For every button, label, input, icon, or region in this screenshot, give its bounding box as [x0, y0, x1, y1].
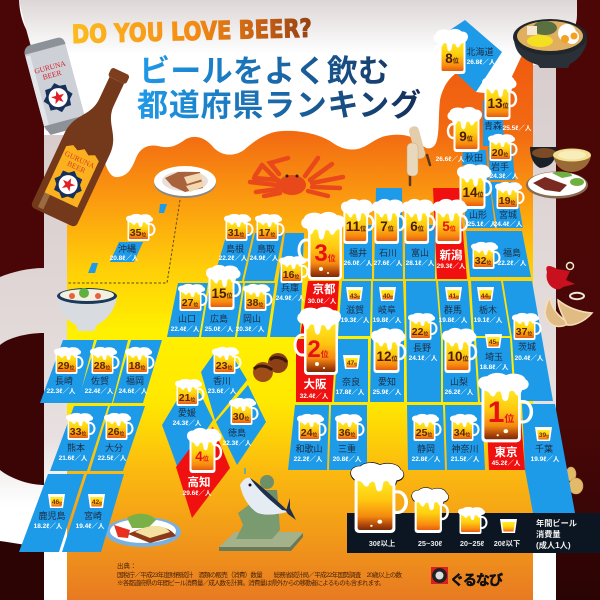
pref: 福井 [344, 225, 373, 279]
pref: 群馬 [438, 281, 472, 336]
pref: 山口: 山口 [178, 314, 196, 324]
pref: 宮崎 [62, 474, 124, 552]
pref: 栃木: 19.1ℓ／人 [474, 316, 503, 324]
pref: 静岡: 静岡 [417, 443, 435, 454]
pref: 兵庫: 兵庫 [281, 282, 299, 293]
source notes [117, 561, 402, 587]
pref: 岡山: 岡山 [243, 314, 261, 324]
pref: 大阪: 大阪 [304, 377, 327, 391]
pref: 滋賀 [338, 281, 371, 336]
source notes: ※各都道府県の年間ビール消費量／成人数を計算。消費量は県外からの移動者によるものも含まれます。 [117, 578, 385, 587]
pref: 宮城: 宮城 [499, 209, 517, 220]
pref: 徳島: 22.3ℓ／人 [223, 439, 252, 447]
pref: 岡山 [236, 283, 275, 337]
pref: 愛知: 愛知 [378, 376, 396, 387]
pref: 香川: 香川 [213, 376, 231, 386]
large mug: 2位 [295, 307, 341, 375]
medium mugs: 25–30 ℓ ranks: 8位 [445, 51, 459, 66]
pref: 岐阜: 岐阜 [378, 304, 396, 315]
pref: 宮城 [490, 182, 523, 228]
pref: 神奈川: 神奈川 [451, 443, 479, 454]
small mugs: 20–25 ℓ ranks: 17位 [259, 227, 275, 239]
pref: 福島 [466, 231, 531, 277]
pref: 青森 [483, 100, 532, 146]
legend: beer consumption scale: 30ℓ以上 [369, 539, 396, 548]
pref: 山形 [465, 170, 497, 228]
small mugs: 20–25 ℓ ranks: 37位 [516, 326, 532, 338]
pref: 山形: 25.1ℓ／人 [468, 220, 497, 228]
pref: 山梨 [443, 338, 478, 402]
pref: 京都 [300, 281, 339, 337]
pref: 千葉: 千葉 [535, 443, 553, 454]
pref: 三重: 20.8ℓ／人 [333, 455, 362, 463]
illustration: takoyaki [253, 353, 288, 382]
pref: 新潟 [433, 188, 467, 279]
pref: 茨城: 20.4ℓ／人 [515, 354, 544, 362]
pref: 青森: 青森 [484, 120, 502, 131]
pref: 愛媛 [162, 393, 213, 466]
pref: 大阪: 32.4ℓ／人 [300, 392, 329, 400]
pref: 高知: 高知 [188, 475, 210, 489]
pref: 奈良 [334, 339, 368, 402]
pref: 京都: 30.0ℓ／人 [308, 297, 337, 305]
pref: 福井: 26.0ℓ／人 [344, 259, 373, 267]
pref: 新潟: 新潟 [440, 248, 463, 262]
pref: 佐賀: 22.4ℓ／人 [85, 387, 114, 395]
illustration: peanuts [545, 467, 583, 506]
small mugs: 20–25 ℓ ranks: 26位 [108, 426, 124, 438]
pref: 岩手: 24.3ℓ／人 [490, 172, 519, 180]
pref: 沖縄: 沖縄 [118, 243, 136, 254]
pref: 栃木: 栃木 [479, 304, 497, 315]
pref: 栃木 [471, 281, 510, 336]
small mugs: 20–25 ℓ ranks: 21位 [179, 392, 195, 404]
pref: 宮城: 24.4ℓ／人 [494, 220, 523, 228]
title: japanese heading: ビールをよく飲む [139, 54, 389, 89]
small glasses: under 20 ℓ ranks: 41位 [449, 293, 459, 300]
pref: 和歌山 [288, 405, 329, 470]
pref: 高知: 29.6ℓ／人 [183, 489, 212, 497]
pref: 石川: 石川 [379, 248, 397, 258]
small mugs: 20–25 ℓ ranks: 25位 [416, 427, 432, 439]
pref: 大分: 22.5ℓ／人 [98, 454, 127, 462]
pref: 熊本: 熊本 [67, 442, 85, 453]
medium mugs: 25–30 ℓ ranks: 13位 [487, 96, 509, 111]
pref: 熊本: 21.6ℓ／人 [59, 454, 88, 462]
title: japanese heading: 都道府県ランキング [137, 88, 421, 123]
pref: 秋田: 26.6ℓ／人 [436, 155, 465, 163]
pref: 福岡: 24.6ℓ／人 [119, 387, 148, 395]
pref: 長崎 [40, 340, 94, 403]
small mugs: 20–25 ℓ ranks: 36位 [339, 427, 355, 439]
pref: 三重 [329, 405, 367, 470]
pref: 神奈川 [445, 405, 485, 470]
pref: 愛媛: 24.3ℓ／人 [173, 419, 202, 427]
pref: 徳島 [216, 385, 266, 465]
pref: 広島: 25.0ℓ／人 [205, 325, 234, 333]
small mugs: 20–25 ℓ ranks: 16位 [283, 269, 299, 281]
small glasses: under 20 ℓ ranks: 44位 [481, 293, 491, 300]
illustration: beer bottle [30, 61, 144, 228]
pref: 東京: 東京 [494, 445, 518, 459]
pref: 山口: 22.4ℓ／人 [171, 325, 200, 333]
small glasses: under 20 ℓ ranks [48, 287, 552, 508]
pref: 佐賀 [77, 340, 128, 403]
legend: beer consumption scale: 年間ビール [536, 518, 577, 528]
illustration: pork dish [154, 166, 216, 198]
pref: 京都: 京都 [312, 282, 336, 296]
pref: 福岡 [113, 340, 162, 403]
pref: 長崎: 22.3ℓ／人 [47, 387, 76, 395]
pref: 滋賀: 滋賀 [346, 304, 364, 315]
small glasses: under 20 ℓ ranks: 47位 [347, 360, 357, 367]
pref: 茨城 [503, 281, 553, 401]
pref: 滋賀: 19.3ℓ／人 [341, 316, 370, 324]
pref: 長崎: 長崎 [55, 375, 73, 386]
pref: 北海道 [450, 20, 502, 92]
pref: 東京 [486, 405, 525, 470]
small mugs: 20–25 ℓ ranks: 28位 [94, 360, 110, 372]
title: do you love beer: DO YOU LOVE BEER? [71, 14, 312, 49]
pref: 鹿児島 [19, 474, 84, 552]
pref: 石川: 27.6ℓ／人 [374, 259, 403, 267]
pref: 鳥取: 鳥取 [257, 243, 275, 254]
small glasses: under 20 ℓ ranks: 42位 [92, 499, 102, 506]
pref: 宮崎: 19.4ℓ／人 [76, 522, 105, 530]
small mugs: 20–25 ℓ ranks: 32位 [475, 255, 491, 267]
medium mugs: 25–30 ℓ ranks: 12位 [376, 349, 398, 364]
pref: 愛媛: 愛媛 [178, 407, 196, 418]
pref: 静岡: 22.8ℓ／人 [412, 455, 441, 463]
pref: 静岡 [407, 405, 445, 470]
illustration: soup bowls [530, 147, 591, 172]
pref: 沖縄: 20.8ℓ／人 [110, 254, 139, 262]
pref: 長野 [406, 281, 441, 402]
pref: 岡山: 20.3ℓ／人 [236, 325, 265, 333]
logo: gurunavi: ぐるなび [450, 572, 503, 588]
large mug: 3位: 3位 [314, 240, 336, 267]
illustration: gyoza [545, 298, 592, 326]
logo: gurunavi [431, 567, 503, 588]
small mugs: 20–25 ℓ ranks: 34位 [454, 427, 470, 439]
pref: 島根: 島根 [226, 243, 244, 254]
pref: 岩手: 岩手 [491, 161, 509, 172]
legend: beer consumption scale: 25~30ℓ [418, 539, 443, 548]
pref: 佐賀: 佐賀 [91, 375, 109, 386]
pref: 千葉: 19.9ℓ／人 [531, 455, 560, 463]
pref: 埼玉 [476, 338, 514, 402]
illustration: noodle bowl [57, 288, 117, 331]
pref: 高知 [176, 427, 230, 518]
pref: 青森: 25.5ℓ／人 [503, 124, 532, 132]
pref: 群馬: 19.8ℓ／人 [439, 316, 468, 324]
medium mugs: 25–30 ℓ ranks [187, 29, 517, 473]
pref: 福島: 福島 [503, 247, 521, 258]
pref: 富山 [405, 225, 435, 279]
legend: beer consumption scale: 20~25ℓ [460, 539, 485, 548]
small glasses: under 20 ℓ ranks: 40位 [383, 293, 393, 300]
pref: 和歌山: 和歌山 [295, 444, 323, 454]
large mug: 2位: 2位 [307, 336, 329, 363]
pref: 鹿児島: 18.2ℓ／人 [34, 522, 63, 530]
illustration: ramen bowl [513, 19, 587, 68]
legend: beer consumption scale: 消費量 [536, 529, 561, 539]
pref: 鳥取: 24.9ℓ／人 [250, 254, 279, 262]
pref: 山形: 山形 [469, 209, 487, 220]
illustration: fish statue [219, 468, 303, 551]
source notes: 国税庁／平成23年度財務統計 酒類の販売（消費）数量 総務省統計局／平成22年国勢調査 20歳以上の数 [117, 570, 402, 579]
small mugs: 20–25 ℓ ranks: 31位 [228, 227, 244, 239]
small mugs: 20–25 ℓ ranks: 38位 [247, 297, 263, 309]
pref: 北海道: 北海道 [466, 46, 494, 57]
pref: 愛知 [370, 338, 404, 402]
pref: 埼玉: 18.8ℓ／人 [480, 363, 509, 371]
pref: 富山: 富山 [411, 247, 429, 258]
pref: 熊本 [50, 406, 108, 471]
large mug: 1位 [478, 373, 531, 442]
pref: 長野: 長野 [413, 343, 431, 353]
small glasses: under 20 ℓ ranks: 45位 [489, 339, 499, 346]
pref: 大分: 大分 [105, 442, 123, 453]
pref: 香川: 23.6ℓ／人 [208, 387, 237, 395]
pref: 三重: 三重 [338, 443, 356, 454]
pref: 和歌山: 22.2ℓ／人 [294, 455, 323, 463]
pref: 長野: 24.1ℓ／人 [409, 354, 438, 362]
small mugs: 20–25 ℓ ranks: 19位 [499, 195, 515, 207]
illustration: beef tongue plate [526, 172, 588, 198]
illustration: beer can [23, 36, 87, 136]
pref: 島根 [213, 233, 253, 281]
pref: 岐阜 [372, 281, 405, 336]
pref: 新潟: 29.3ℓ／人 [437, 262, 466, 270]
medium mugs: 25–30 ℓ ranks: 15位 [211, 286, 233, 301]
small mugs: 20–25 ℓ ranks: 24位 [301, 427, 317, 439]
small mugs: 20–25 ℓ ranks: 20位 [492, 147, 508, 159]
pref: 福井: 福井 [349, 247, 367, 258]
illustration: crab [250, 158, 343, 196]
small glasses: under 20 ℓ ranks: 46位 [52, 499, 62, 506]
large mug: 3位 [299, 212, 345, 280]
small glasses: under 20 ℓ ranks: 39位 [539, 432, 549, 439]
pref: 島根: 22.2ℓ／人 [219, 254, 248, 262]
beer panel with foam edge [67, 54, 533, 600]
pref: 東京: 45.2ℓ／人 [492, 459, 521, 467]
pref: 岐阜: 19.8ℓ／人 [373, 316, 402, 324]
pref: 群馬: 群馬 [444, 304, 462, 315]
pref: 大分 [90, 406, 145, 471]
title: japanese heading [137, 54, 421, 123]
pref: 神奈川: 21.5ℓ／人 [451, 455, 480, 463]
legend: beer consumption scale: (成人1人) [536, 540, 571, 550]
small mugs: 20–25 ℓ ranks: 22位 [412, 326, 428, 338]
pref: 香川 [201, 355, 247, 420]
pref: 埼玉: 埼玉 [485, 351, 503, 362]
pref: 兵庫 [270, 233, 305, 337]
pref: 千葉 [522, 404, 575, 513]
pref: 茨城: 茨城 [518, 342, 536, 352]
medium mugs: 25–30 ℓ ranks: 7位 [380, 219, 394, 234]
pref: 鳥取 [244, 233, 283, 281]
pref: 秋田 [436, 150, 487, 165]
legend: beer consumption scale [347, 463, 600, 553]
pref: 広島: 広島 [210, 313, 228, 324]
pref: 秋田: 秋田 [465, 152, 483, 163]
pref: 鹿児島: 鹿児島 [38, 510, 66, 521]
medium mugs: 25–30 ℓ ranks: 9位 [459, 129, 473, 144]
illustration: beer can: GURUNA [33, 59, 67, 76]
illustration: beer can: BEER [42, 68, 62, 82]
source notes: 出典： [117, 561, 136, 570]
small mugs: 20–25 ℓ ranks: 29位 [58, 360, 74, 372]
pref: 徳島: 徳島 [228, 427, 246, 438]
pref: 山梨: 26.2ℓ／人 [445, 388, 474, 396]
pref: 大阪 [296, 339, 336, 402]
pref: 福島: 22.2ℓ／人 [498, 259, 527, 267]
medium mugs: 25–30 ℓ ranks: 6位 [410, 219, 424, 234]
large mug: 1位: 1位 [488, 396, 514, 429]
pref: 宮崎: 宮崎 [84, 510, 102, 521]
pref: 石川 [374, 188, 403, 279]
small mugs: 20–25 ℓ ranks: 18位 [129, 360, 145, 372]
small glasses: under 20 ℓ ranks: 43位 [350, 293, 360, 300]
pref: 広島 [201, 283, 243, 337]
illustration: beer bottle: BEER [66, 159, 87, 175]
pref: 岩手 [488, 147, 519, 180]
map tile: island markers and route line [67, 200, 180, 283]
illustration: red sauce pot [546, 262, 584, 299]
medium mugs: 25–30 ℓ ranks: 14位 [462, 185, 484, 200]
pref: 福岡: 福岡 [126, 375, 144, 386]
medium mugs: 25–30 ℓ ranks: 10位 [447, 349, 469, 364]
pref: 沖縄 [110, 242, 143, 262]
illustration: chicken nanban dish [105, 514, 181, 547]
small mugs: 20–25 ℓ ranks: 23位 [216, 360, 232, 372]
small mugs: 20–25 ℓ ranks [54, 134, 541, 441]
medium mugs: 25–30 ℓ ranks: 11位 [346, 219, 366, 234]
illustration: oden skewers [407, 125, 430, 185]
pref: 北海道: 26.8ℓ／人 [467, 58, 496, 66]
pref: 山梨: 山梨 [450, 376, 468, 387]
pref: 奈良: 奈良 [342, 376, 360, 387]
pref: 兵庫: 24.9ℓ／人 [276, 294, 305, 302]
small mugs: 20–25 ℓ ranks: 35位 [130, 227, 146, 239]
medium mugs: 25–30 ℓ ranks: 5位 [442, 219, 456, 234]
small mugs: 20–25 ℓ ranks: 27位 [182, 297, 198, 309]
pref: 愛知: 25.9ℓ／人 [373, 388, 402, 396]
pref: 山口 [167, 283, 208, 337]
medium mugs: 25–30 ℓ ranks: 4位 [195, 449, 209, 464]
small mugs: 20–25 ℓ ranks: 30位 [233, 411, 249, 423]
pref: 富山: 28.1ℓ／人 [406, 259, 435, 267]
small mugs: 20–25 ℓ ranks: 33位 [70, 426, 86, 438]
illustration: beer bottle: GURUNA [63, 149, 97, 171]
legend: beer consumption scale: 20ℓ以下 [494, 539, 520, 548]
pref: 奈良: 17.8ℓ／人 [336, 388, 365, 396]
